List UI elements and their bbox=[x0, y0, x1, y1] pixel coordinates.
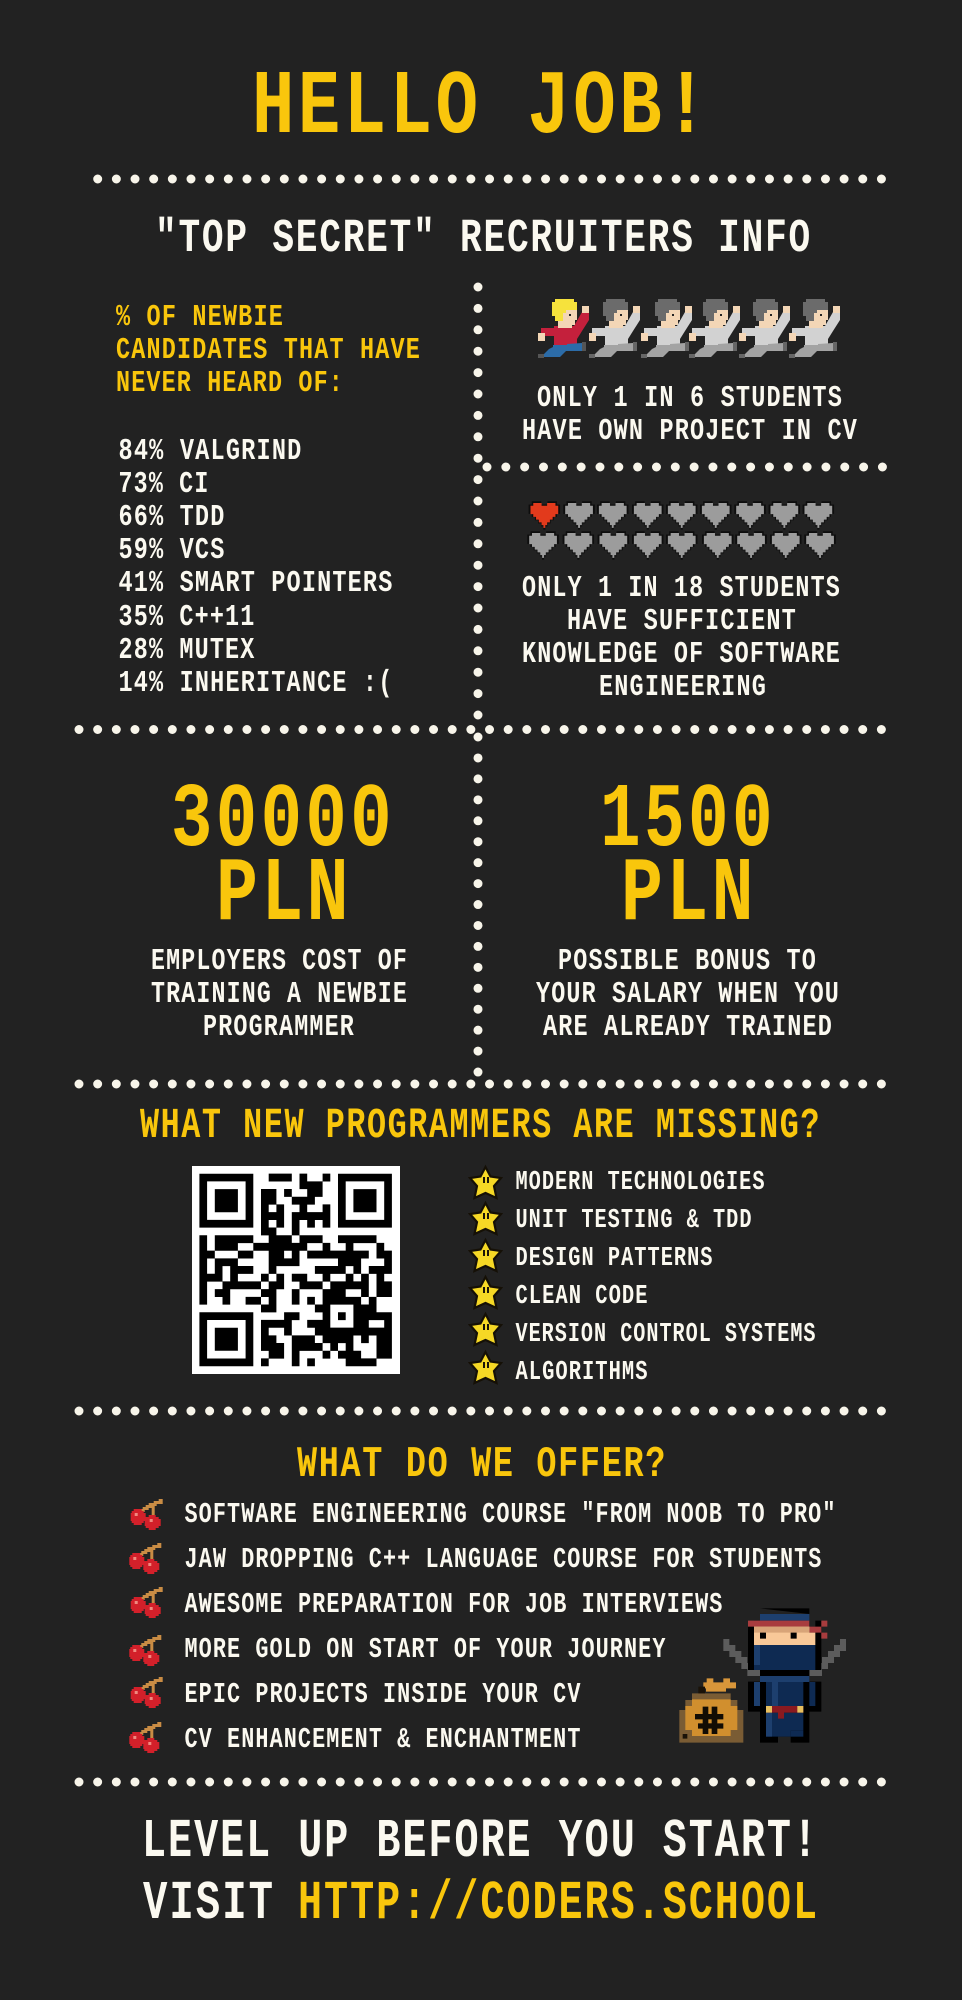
panel: 1 in 6 students bbox=[522, 299, 858, 449]
item: clean code: CLEAN CODE bbox=[516, 1282, 648, 1312]
list: missing skills bbox=[470, 1167, 816, 1388]
item: more gold bbox=[129, 1633, 667, 1666]
icon: eighteen hearts bbox=[527, 501, 836, 560]
line: visit url: VISIT bbox=[143, 1872, 275, 1935]
list: what we offer bbox=[129, 1498, 837, 1756]
list: percentages: 59% VCS bbox=[118, 533, 226, 568]
text: employers cost bbox=[151, 944, 408, 1045]
item: clean code bbox=[470, 1277, 648, 1312]
item: algorithms bbox=[470, 1352, 648, 1388]
heading: percent of newbie candidates bbox=[116, 300, 421, 401]
QR code bbox=[192, 1166, 400, 1374]
big number: 30000 PLN bbox=[171, 770, 395, 947]
heading: percent of newbie candidates: CANDIDATES THAT HAVE bbox=[116, 333, 421, 368]
list: percentages: 66% TDD bbox=[118, 500, 226, 535]
line: visit url bbox=[143, 1872, 819, 1935]
icon: six running students bbox=[538, 299, 840, 358]
list: percentages: 28% MUTEX bbox=[118, 633, 256, 668]
text: only 1 in 6 bbox=[522, 381, 858, 449]
list: percentages: 41% SMART POINTERS bbox=[118, 566, 394, 601]
text: only 1 in 18 bbox=[522, 571, 841, 705]
item: version control systems bbox=[470, 1314, 816, 1350]
item: unit testing: UNIT TESTING & TDD bbox=[516, 1206, 752, 1236]
panel: 30000 PLN cost bbox=[151, 770, 408, 1045]
item: job interviews: AWESOME PREPARATION FOR JOB INTERVIEWS bbox=[184, 1588, 724, 1621]
text: possible bonus: YOUR SALARY WHEN YOU bbox=[536, 977, 840, 1012]
section heading: what do we offer: WHAT DO WE OFFER? bbox=[297, 1440, 667, 1490]
item: design patterns: DESIGN PATTERNS bbox=[516, 1244, 714, 1274]
list: percentages: 73% CI bbox=[118, 467, 210, 502]
panel: newbie candidates never heard of bbox=[116, 300, 421, 701]
call to action bbox=[142, 1810, 819, 1935]
text: employers cost: PROGRAMMER bbox=[203, 1010, 355, 1045]
item: modern technologies bbox=[470, 1167, 766, 1198]
list: percentages: 84% VALGRIND bbox=[118, 434, 302, 469]
title: HELLO JOB! bbox=[252, 57, 711, 160]
text: employers cost: TRAINING A NEWBIE bbox=[151, 977, 408, 1012]
heading: percent of newbie candidates: NEVER HEARD OF: bbox=[116, 366, 344, 401]
text: only 1 in 6: HAVE OWN PROJECT IN CV bbox=[522, 414, 858, 449]
item: cv enhancement: CV ENHANCEMENT & ENCHANTMENT bbox=[184, 1723, 582, 1756]
text: only 1 in 18: ONLY 1 IN 18 STUDENTS bbox=[522, 571, 841, 606]
item: cv enhancement bbox=[129, 1722, 582, 1756]
item: more gold: MORE GOLD ON START OF YOUR JOURNEY bbox=[184, 1633, 666, 1666]
panel: 1 in 18 students bbox=[522, 501, 841, 705]
big number: 1500 PLN: 1500 bbox=[600, 770, 776, 873]
text: employers cost: EMPLOYERS COST OF bbox=[151, 944, 408, 979]
list: percentages: 35% C++11 bbox=[118, 600, 256, 635]
swords bbox=[723, 1639, 846, 1676]
text: only 1 in 6: ONLY 1 IN 6 STUDENTS bbox=[537, 381, 843, 416]
item: design patterns bbox=[470, 1240, 714, 1274]
icon: money bag bbox=[679, 1678, 743, 1743]
list: percentages: 14% INHERITANCE :( bbox=[118, 666, 394, 701]
item: unit testing bbox=[470, 1203, 752, 1236]
list: percentages bbox=[118, 434, 394, 701]
big number: 1500 PLN: PLN bbox=[621, 844, 757, 947]
big number: 1500 PLN bbox=[600, 770, 776, 947]
panel: 1500 PLN bonus bbox=[536, 770, 840, 1045]
big number: 30000 PLN: 30000 bbox=[171, 770, 395, 873]
text: possible bonus bbox=[536, 944, 840, 1045]
text: possible bonus: POSSIBLE BONUS TO bbox=[558, 944, 817, 979]
item: version control systems: VERSION CONTROL SYSTEMS bbox=[516, 1320, 816, 1350]
item: epic projects bbox=[131, 1677, 581, 1711]
text: possible bonus: ARE ALREADY TRAINED bbox=[543, 1010, 833, 1045]
item: job interviews bbox=[131, 1587, 723, 1621]
text: only 1 in 18: ENGINEERING bbox=[599, 670, 767, 705]
item: modern technologies: MODERN TECHNOLOGIES bbox=[516, 1168, 766, 1198]
text: only 1 in 18: HAVE SUFFICIENT bbox=[567, 604, 797, 639]
item: epic projects: EPIC PROJECTS INSIDE YOUR CV bbox=[184, 1678, 582, 1711]
icon: ninja bbox=[723, 1608, 846, 1743]
big number: 30000 PLN: PLN bbox=[216, 844, 352, 947]
text: only 1 in 18: KNOWLEDGE OF SOFTWARE bbox=[522, 637, 841, 672]
heading: percent of newbie candidates: % OF NEWBIE bbox=[116, 300, 284, 335]
item: algorithms: ALGORITHMS bbox=[516, 1358, 648, 1388]
